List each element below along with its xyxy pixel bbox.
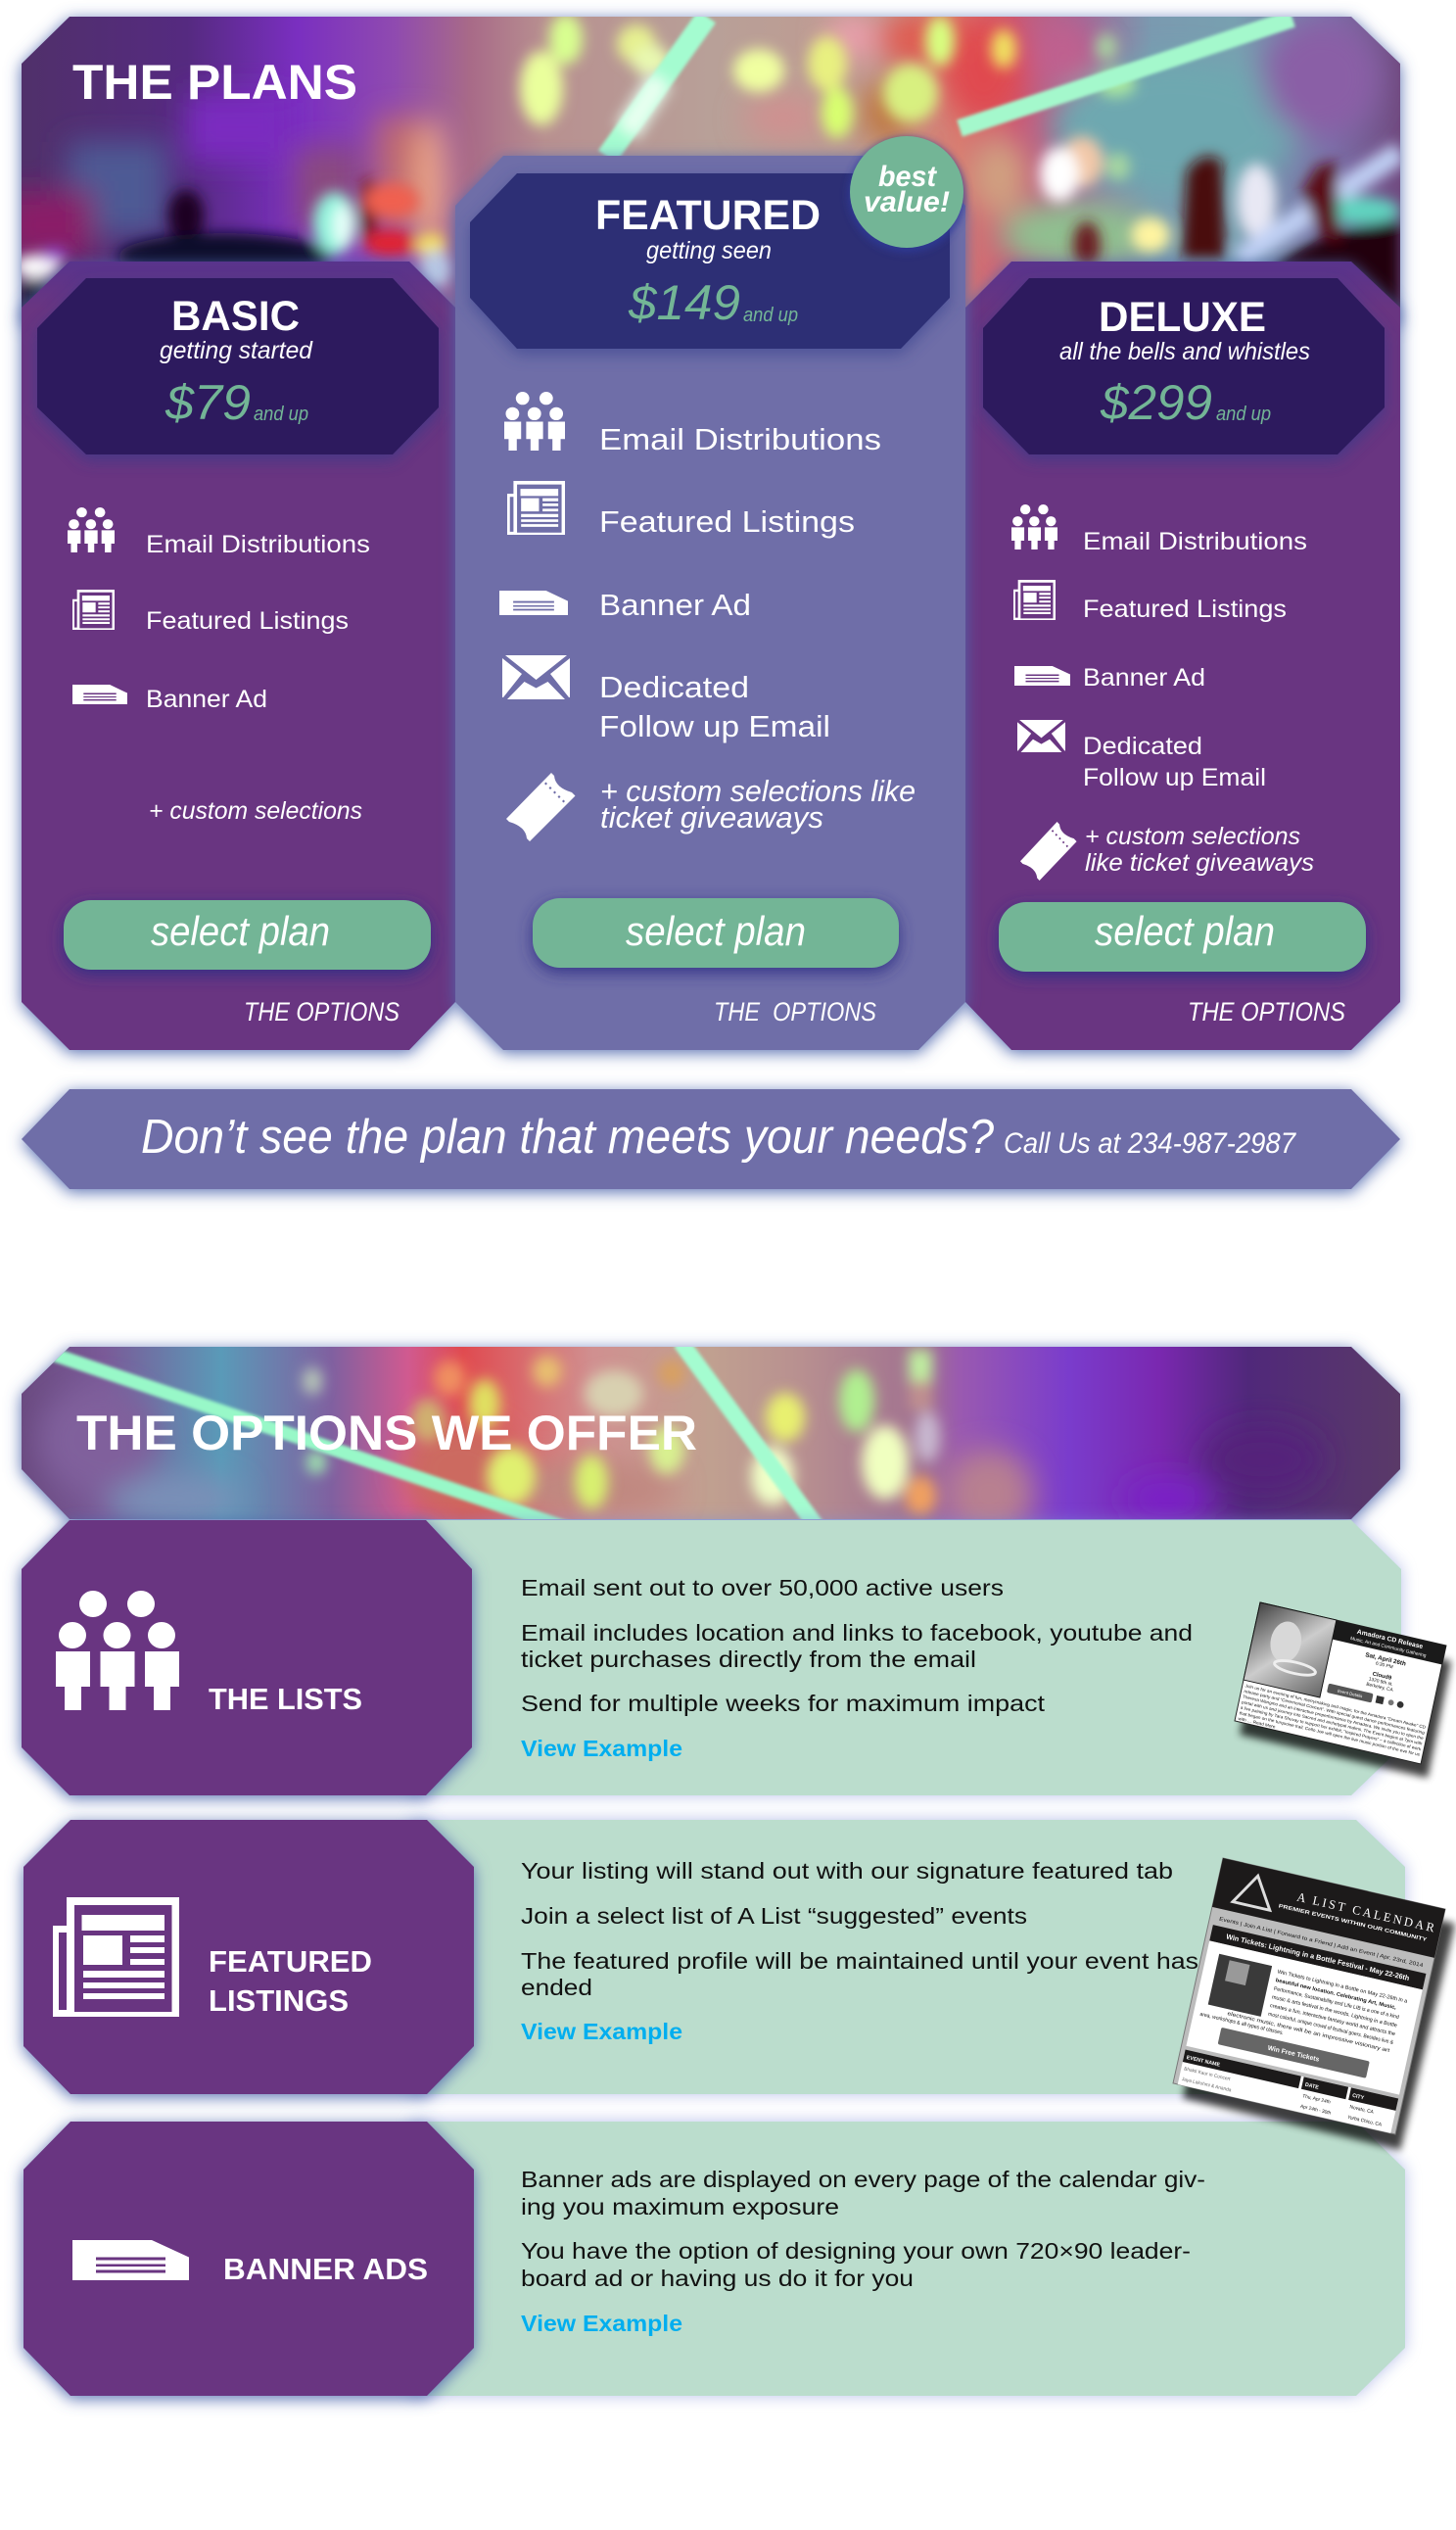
link: the options: THE OPTIONS — [714, 997, 876, 1026]
screenshot: featured listing example: Apr 24th - 30th — [1299, 2104, 1332, 2117]
screenshot: event email example: Amadora CD Release — [1356, 1629, 1424, 1650]
feature: featured listings — [1013, 580, 1287, 623]
panel: featured plan — [455, 156, 965, 1050]
screenshot: featured listing example: PREMIER EVENTS WITHIN OUR COMMUNITY — [1278, 1903, 1428, 1943]
screenshot: featured listing example: Win Tickets: Lightning in a Bottle Festival - May 22-26th — [1225, 1932, 1410, 1982]
screenshot: featured listing example: music & arts festival in the woods. Lightning in a Bottle — [1271, 1994, 1397, 2029]
screenshot: event email example: 1320 9th st. — [1368, 1676, 1393, 1688]
screenshot: featured listing example — [1173, 1858, 1455, 2150]
panel: banner ads description: You have the option of designing your own 720×90 leader- — [521, 2238, 1191, 2264]
panel: featured listings label — [23, 1820, 474, 2094]
feature: featured listings — [507, 481, 855, 539]
link: the options: THE OPTIONS — [1188, 997, 1345, 1026]
button: select plan: select plan — [626, 908, 806, 954]
featured price header: and up — [743, 305, 798, 326]
screenshot: featured listing example: DATE — [1304, 2082, 1320, 2091]
screenshot: event email example: that began on the turquoise trail. Cello Joe will open the live music portion of the eve for us — [1239, 1710, 1421, 1757]
screenshot: featured listing example: A LIST CALENDAR — [1295, 1890, 1438, 1935]
screenshot: featured listing example: Win Tickets to Lightning in a Bottle on May 22-26th in a — [1277, 1969, 1408, 2005]
feature: dedicated follow up email: Dedicated — [599, 670, 749, 704]
screenshot: featured listing example: Jaya Lakshmi & Ananda — [1181, 2077, 1232, 2093]
feature: featured listings — [72, 590, 349, 635]
screenshot: event email example: a live painting by Tara Shuvay to support her exhibit, “Inspired Prayers” – a collection of work — [1240, 1705, 1423, 1751]
screenshot: event email example: Join us for an evening of fun, merrymaking and magic, for the Amadora “Dream Awake” CD — [1245, 1683, 1427, 1730]
feature: email distributions — [1011, 504, 1307, 555]
feature: banner ad — [1014, 664, 1205, 692]
button: select plan: select plan — [151, 908, 330, 954]
screenshot: featured listing example: Novato, CA — [1349, 2104, 1375, 2116]
panel: basic plan — [22, 262, 455, 1050]
deluxe price header: DELUXE — [1099, 294, 1266, 341]
badge: best value: value! — [864, 186, 950, 218]
panel: the lists description: Email sent out to over 50,000 active users — [521, 1575, 1004, 1600]
feature: dedicated follow up email: Follow up Email — [599, 709, 830, 743]
feature: email distributions: Email Distributions — [599, 422, 881, 456]
link: the options: THE OPTIONS — [244, 997, 399, 1026]
basic price header — [37, 278, 439, 454]
basic price header: BASIC — [171, 293, 300, 340]
feature: email distributions: Email Distributions — [1083, 528, 1307, 555]
panel: the lists description: View Example — [521, 1736, 682, 1761]
screenshot: event email example: 6:30 PM — [1375, 1661, 1393, 1670]
button: select plan: select plan — [1095, 908, 1275, 954]
screenshot: event email example: Event Details — [1338, 1689, 1363, 1698]
panel: the lists description — [411, 1520, 1401, 1795]
screenshot: event email example: Berkeley, CA — [1366, 1682, 1394, 1694]
deluxe price header: $299 — [1100, 375, 1212, 430]
feature: featured listings: Featured Listings — [599, 504, 855, 539]
feature: dedicated follow up email: Dedicated — [1083, 733, 1202, 760]
panel: banner ads description: ing you maximum exposure — [521, 2194, 839, 2220]
panel: featured listings description: Join a select list of A List “suggested” events — [521, 1903, 1027, 1929]
panel: the lists label — [22, 1520, 472, 1795]
button: select plan — [533, 898, 899, 973]
deluxe price header — [983, 278, 1385, 454]
screenshot: event email example: with … Read More — [1238, 1716, 1277, 1730]
screenshot: featured listing example: Performance, Sustainability and Life LIB is a one of a kind — [1273, 1986, 1399, 2021]
screenshot: featured listing example: Events | Join A List | Forward to a Friend | Add an Event | Apr. 23rd, 2014 — [1218, 1917, 1424, 1969]
button: select plan — [999, 902, 1366, 977]
panel: featured listings label: FEATURED — [209, 1944, 372, 1979]
screenshot: event email example: release party and “Ceremonial Concert”. With special guest dance performances featuring — [1244, 1689, 1426, 1736]
heading: the options we offer: THE OPTIONS WE OFFER — [76, 1406, 697, 1460]
feature: banner ad — [72, 685, 267, 713]
feature: email distributions — [68, 507, 370, 558]
screenshot: featured listing example: electronic music, there will be an impressive visionary art — [1227, 2011, 1390, 2054]
callout: call us banner: Call Us at 234-987-2987 — [1004, 1127, 1296, 1160]
featured price header: getting seen — [646, 237, 772, 264]
custom selections note: + custom selections — [149, 797, 362, 825]
feature: banner ad: Banner Ad — [146, 686, 267, 713]
basic price header: $79 — [164, 375, 251, 430]
deluxe price header: and up — [1216, 404, 1271, 425]
panel: banner ads description: View Example — [521, 2311, 682, 2336]
screenshot: event email example: Theresa Wangmo and an interactive preperformance by Amadora. We invite you to open the — [1243, 1695, 1425, 1741]
screenshot: featured listing example: creates a fun, interactive fantasy world and attracts the — [1269, 2003, 1395, 2037]
deluxe price header: all the bells and whistles — [1059, 338, 1310, 365]
feature: custom selections — [1020, 822, 1314, 881]
heading: the plans: THE PLANS — [72, 55, 357, 110]
feature: custom selections: ticket giveaways — [600, 800, 823, 835]
panel: deluxe plan — [965, 262, 1400, 1050]
feature: banner ad: Banner Ad — [1083, 664, 1205, 692]
panel: featured listings description: ended — [521, 1975, 592, 2000]
screenshot: event email example: Sat, April 26th — [1365, 1651, 1407, 1668]
screenshot: featured listing example: Win Free Tickets — [1267, 2045, 1320, 2064]
feature: featured listings: Featured Listings — [146, 607, 349, 635]
callout: call us banner: Don’t see the plan that meets your needs? — [141, 1111, 995, 1164]
feature: custom selections: like ticket giveaways — [1085, 849, 1314, 877]
panel: options photo header — [22, 1342, 1400, 1538]
panel: banner ads label: BANNER ADS — [223, 2252, 428, 2286]
badge: best value — [848, 136, 965, 253]
panel: the lists description: Send for multiple weeks for maximum impact — [521, 1691, 1046, 1716]
screenshot: featured listing example: Yorba Chico, CA — [1347, 2115, 1383, 2128]
panel: featured listings description: The featured profile will be maintained until your event has — [521, 1948, 1198, 1974]
feature: custom selections: + custom selections — [1085, 823, 1300, 850]
panel: the lists label: THE LISTS — [209, 1682, 362, 1716]
panel: featured listings description — [411, 1820, 1405, 2094]
panel: featured listings description: Your listing will stand out with our signature featured tab — [521, 1858, 1173, 1884]
panel: banner ads description: Banner ads are displayed on every page of the calendar giv- — [521, 2167, 1205, 2192]
basic price header: getting started — [160, 337, 313, 364]
feature: custom selections: + custom selections like — [600, 774, 916, 808]
badge: best value: best — [878, 161, 938, 193]
panel: the lists description: ticket purchases directly from the email — [521, 1647, 976, 1672]
screenshot: event email example: Music, Art and Community Gathering — [1349, 1636, 1427, 1659]
feature: custom selections — [506, 773, 916, 841]
screenshot: featured listing example: beautiful new location. Celebrating Art, Music, — [1275, 1978, 1397, 2011]
screenshot: event email example: Cloud9 — [1372, 1671, 1392, 1682]
panel: the plans photo header — [5, 14, 1400, 323]
feature: dedicated follow up email: Follow up Email — [1083, 764, 1266, 791]
panel: banner ads description — [411, 2122, 1405, 2396]
screenshot: featured listing example: most colorful, unique crowd of festival goers. Besides live & — [1267, 2012, 1394, 2046]
callout: call us banner — [22, 1089, 1400, 1189]
panel: the lists description: Email includes location and links to facebook, youtube and — [521, 1620, 1193, 1646]
basic price header: and up — [254, 404, 308, 425]
panel: banner ads description: board ad or having us do it for you — [521, 2266, 914, 2291]
screenshot: event email example — [1235, 1602, 1451, 1778]
feature: banner ad — [499, 588, 751, 622]
feature: dedicated follow up email — [502, 655, 830, 743]
screenshot: event email example: portal with us and journey into Sacred and archetypal realms. The Event begins at 7pm with — [1242, 1699, 1424, 1746]
feature: email distributions: Email Distributions — [146, 531, 370, 558]
panel: featured listings label: LISTINGS — [209, 1983, 349, 2018]
featured price header: FEATURED — [595, 192, 821, 239]
panel: banner ads label — [23, 2122, 474, 2396]
feature: email distributions — [504, 392, 881, 456]
feature: dedicated follow up email — [1017, 720, 1266, 791]
screenshot: featured listing example: Thu, Apr 24th — [1302, 2093, 1331, 2106]
feature: banner ad: Banner Ad — [599, 588, 751, 622]
featured price header — [470, 173, 950, 349]
screenshot: featured listing example: EVENT NAME — [1186, 2055, 1221, 2069]
screenshot: featured listing example: Bhakti Kaur in Concert — [1184, 2066, 1232, 2082]
button: select plan — [64, 900, 431, 975]
panel: featured listings description: View Example — [521, 2019, 682, 2044]
featured price header: $149 — [628, 275, 740, 330]
screenshot: featured listing example: area, workshops & all types of classes. — [1199, 2012, 1284, 2036]
screenshot: featured listing example: CITY — [1351, 2093, 1365, 2101]
feature: featured listings: Featured Listings — [1083, 596, 1287, 623]
